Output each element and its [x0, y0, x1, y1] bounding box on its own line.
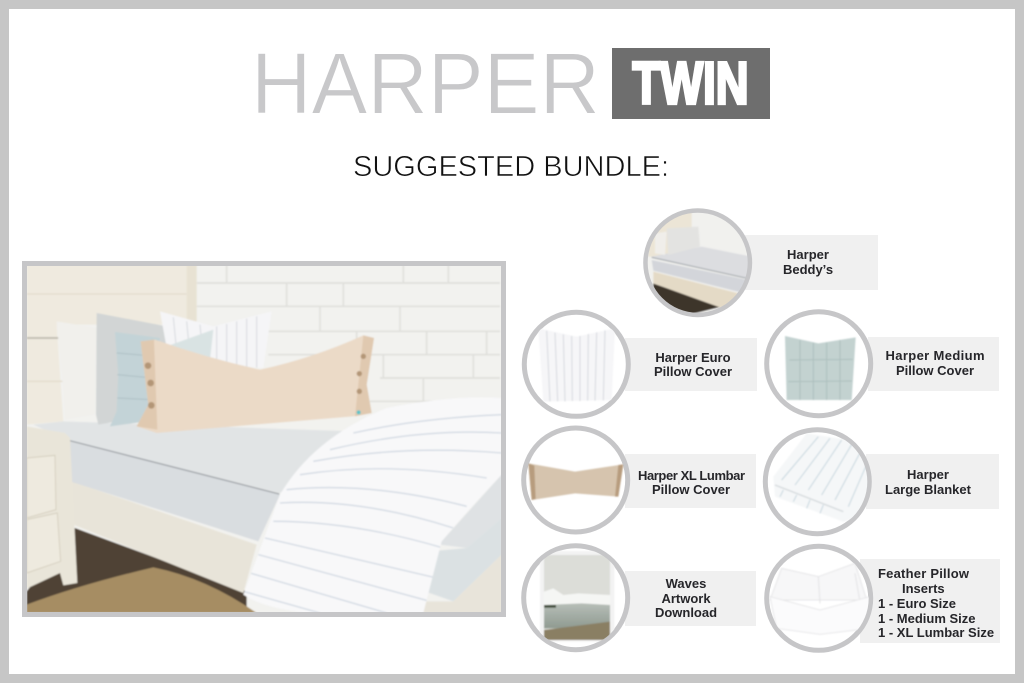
label text: Harper: [787, 247, 829, 262]
label background: [625, 338, 757, 391]
item: Harper Medium Pillow Cover: [767, 312, 999, 416]
item: Harper XL Lumbar Pillow Cover: [524, 428, 756, 532]
icon: folded blanket: [765, 430, 870, 534]
label text: Harper: [907, 467, 949, 482]
icon: beddy bed photo: [642, 207, 755, 320]
item: Harper Beddy's: [642, 207, 878, 320]
label text: Harper Medium: [886, 348, 984, 363]
label text: Harper Euro: [655, 350, 731, 365]
label text: Inserts: [902, 581, 945, 596]
label text: Beddy’s: [783, 262, 833, 277]
label text: 1 - Euro Size: [878, 596, 956, 611]
label text: 1 - XL Lumbar Size: [878, 625, 994, 640]
icon: XL lumbar pillow: [524, 428, 628, 532]
label text: Pillow Cover: [896, 363, 974, 378]
icon: waves artwork: [524, 546, 628, 650]
label text: Waves: [666, 576, 706, 591]
label background: [866, 454, 999, 509]
item: Harper Large Blanket: [765, 430, 999, 534]
icon: feather inserts: [767, 546, 871, 650]
label background: [625, 454, 756, 508]
icon: medium pillow: [767, 312, 871, 416]
label text: Pillow Cover: [654, 364, 732, 379]
label background: [745, 235, 878, 290]
label background: [860, 559, 1000, 643]
badge: TWIN: TWIN: [632, 50, 748, 116]
label text: Artwork: [661, 591, 711, 606]
item: Waves Artwork Download: [524, 546, 756, 650]
title: HARPER: HARPER: [251, 36, 600, 132]
label text: Harper XL Lumbar: [638, 468, 745, 483]
label text: Download: [655, 605, 717, 620]
label text: Feather Pillow: [878, 566, 970, 581]
label text: Pillow Cover: [652, 482, 730, 497]
item: Feather Pillow Inserts: [767, 546, 1000, 650]
icon: euro pillow: [524, 312, 628, 416]
panel: main bedroom photo: [20, 258, 510, 618]
label background: [625, 571, 756, 626]
label background: [868, 337, 999, 391]
heading: suggested bundle: SUGGESTED BUNDLE:: [353, 151, 669, 183]
label text: Large Blanket: [885, 482, 972, 497]
item: Harper Euro Pillow Cover: [524, 312, 757, 416]
label text: 1 - Medium Size: [878, 611, 976, 626]
